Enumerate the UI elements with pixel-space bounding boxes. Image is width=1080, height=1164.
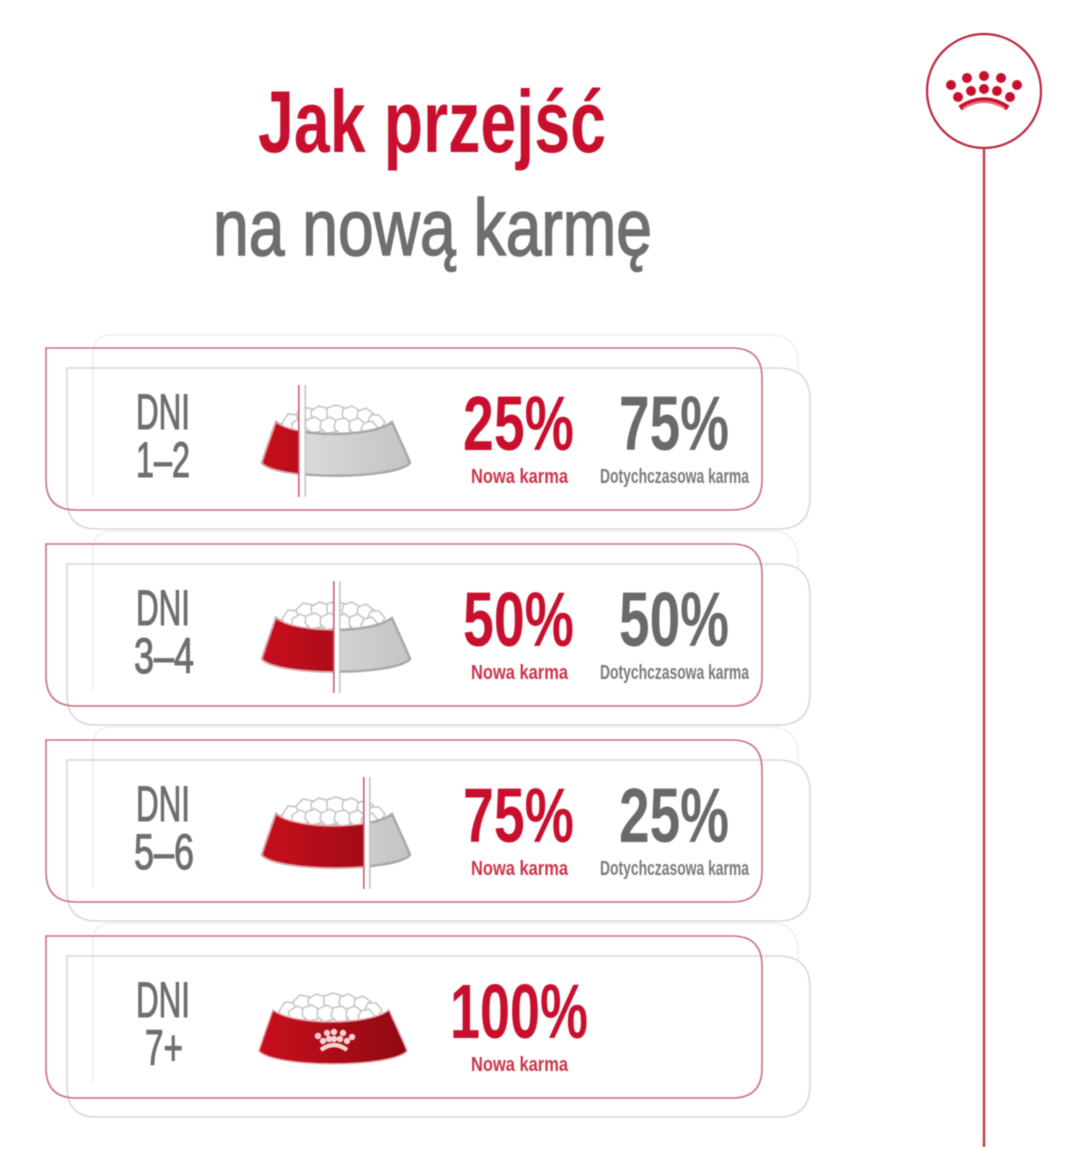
day label	[134, 580, 194, 684]
panel: days 1-2	[46, 335, 810, 529]
new food share: 50%	[463, 577, 574, 663]
day label	[136, 384, 190, 488]
day label: 7+	[145, 1020, 183, 1076]
new food share	[450, 969, 588, 1076]
day label: DNI	[136, 776, 190, 832]
day label: 5–6	[134, 824, 194, 880]
panel: days 5-6	[46, 727, 810, 921]
old food share: 75%	[619, 381, 729, 467]
day label: 1–2	[136, 432, 190, 488]
day label: DNI	[136, 580, 190, 636]
icon: bowl 25 percent	[262, 385, 410, 497]
heading: Jak przejść: Jak przejść	[258, 72, 606, 171]
old food share	[600, 577, 750, 684]
old food share: Dotychczasowa karma	[600, 858, 750, 880]
new food share: 75%	[463, 773, 574, 859]
new food share: 100%	[450, 969, 588, 1055]
old food share: Dotychczasowa karma	[600, 662, 750, 684]
old food share	[600, 773, 750, 880]
title	[213, 72, 652, 272]
old food share: Dotychczasowa karma	[600, 466, 750, 488]
logo: crown in circle with vertical line	[927, 34, 1041, 1147]
new food share: Nowa karma	[471, 662, 569, 684]
day label: DNI	[136, 972, 190, 1028]
day label	[134, 776, 194, 880]
day label: DNI	[136, 384, 190, 440]
panel: days 7+	[46, 923, 810, 1117]
new food share: Nowa karma	[471, 1054, 569, 1076]
icon: bowl 75 percent	[262, 777, 410, 889]
icon: full red bowl with crown	[259, 993, 407, 1064]
new food share	[463, 773, 574, 880]
new food share	[463, 381, 574, 488]
new food share: 25%	[463, 381, 574, 467]
old food share: 50%	[619, 577, 729, 663]
old food share: 25%	[619, 773, 729, 859]
heading: na nową karmę: na nową karmę	[213, 183, 652, 272]
icon: bowl 50 percent	[262, 581, 410, 693]
old food share	[600, 381, 750, 488]
new food share: Nowa karma	[471, 466, 569, 488]
panel: days 3-4	[46, 531, 810, 725]
day label: 3–4	[134, 628, 194, 684]
new food share	[463, 577, 574, 684]
icon: crown	[946, 71, 1022, 108]
day label	[136, 972, 190, 1076]
new food share: Nowa karma	[471, 858, 569, 880]
